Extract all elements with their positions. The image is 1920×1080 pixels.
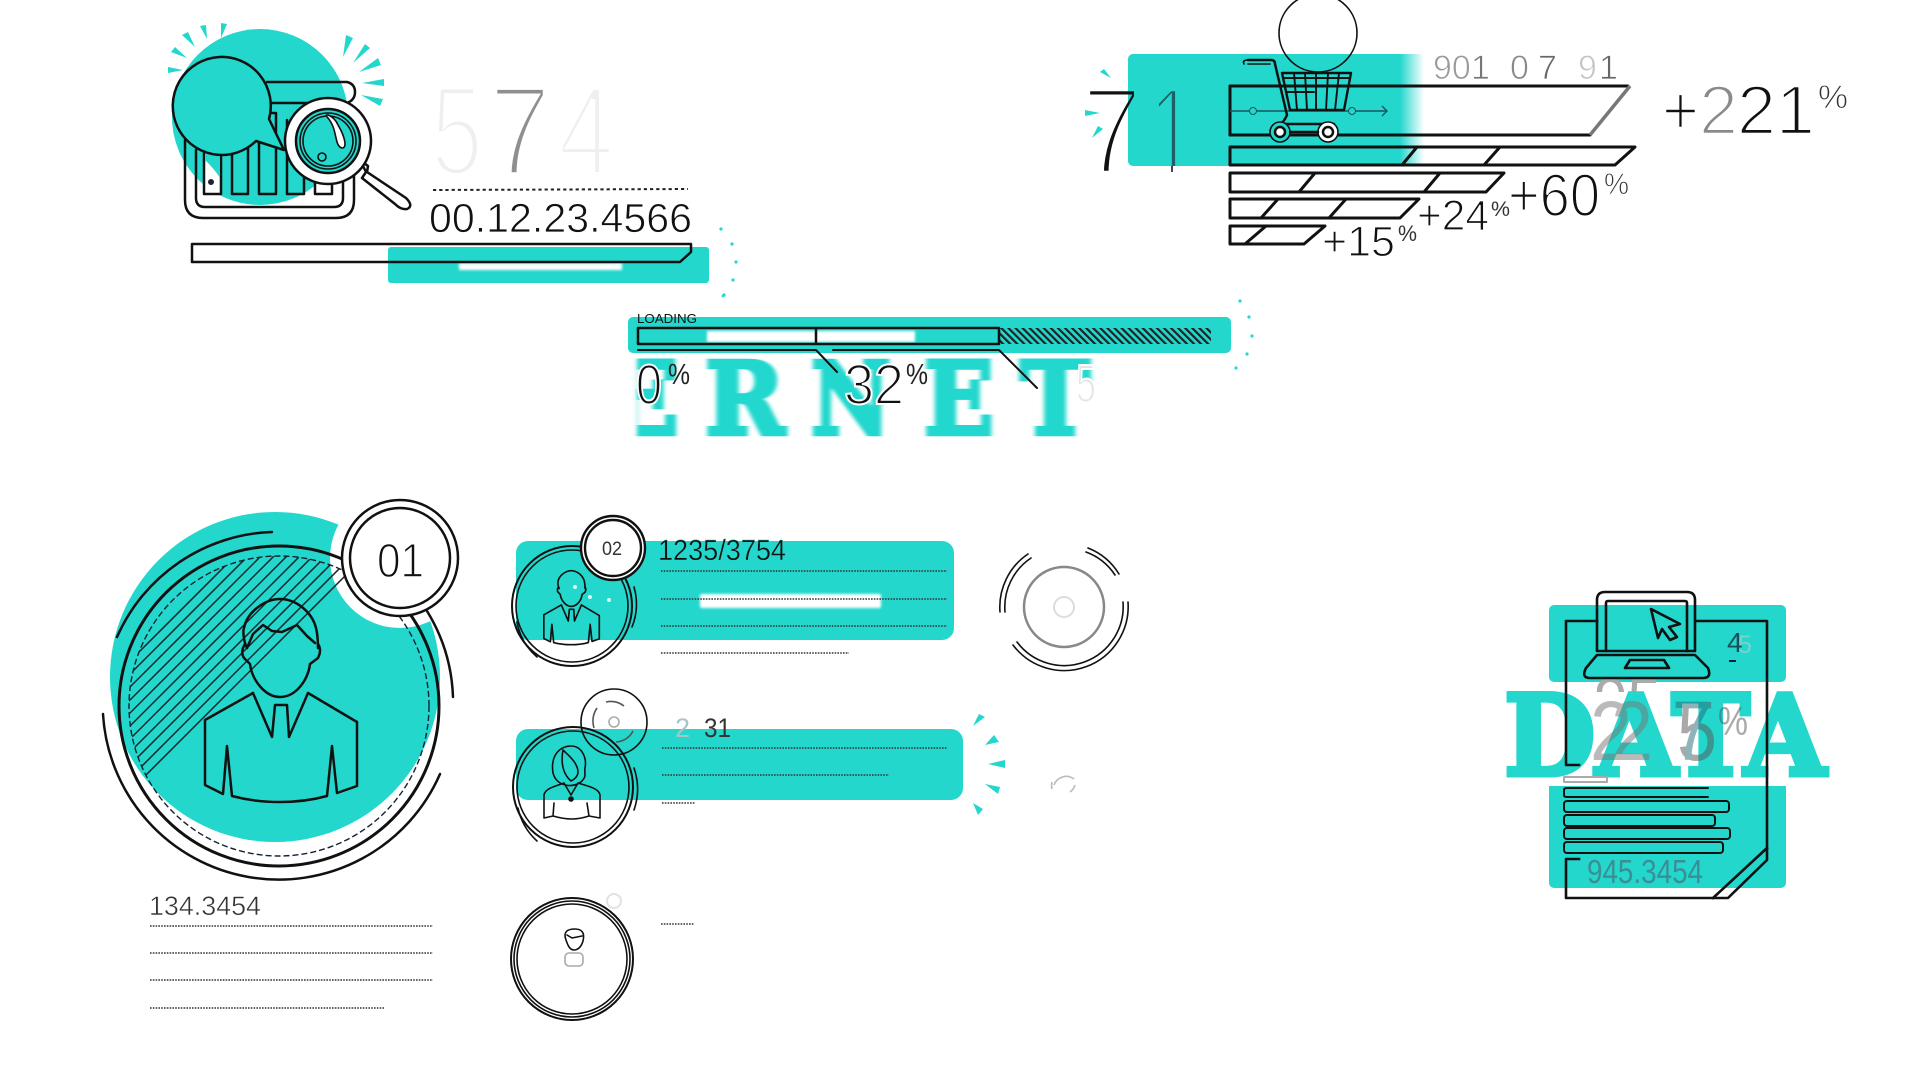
+221 percent: 2 <box>1699 71 1738 149</box>
top digits: 0 <box>1510 49 1529 87</box>
ghost digits above: 95 <box>1594 666 1661 733</box>
number 4 with ghost 5 <box>1727 627 1752 661</box>
value text: 134.3454 <box>149 891 261 921</box>
panel: avatar 03 <box>511 894 694 1020</box>
sparkles <box>573 585 611 602</box>
label: loading: LOADING <box>637 311 697 326</box>
teal card <box>516 729 963 800</box>
value text: 945.3454 <box>1587 853 1703 890</box>
badge 01 <box>342 500 458 616</box>
ghost digits: 2 <box>1590 684 1632 778</box>
number 71 <box>1090 91 1176 171</box>
number 71: 7 <box>1082 63 1142 201</box>
value text: 2 <box>675 713 690 743</box>
icon: bar chart frame <box>185 82 355 218</box>
badge white halo <box>330 488 470 628</box>
progress bar outline <box>192 244 691 262</box>
document text bars <box>1564 777 1730 853</box>
document outline <box>1566 621 1767 898</box>
ghost digits: 2 <box>1611 684 1653 778</box>
white highlight <box>707 331 915 342</box>
teal overlap on first bar <box>205 141 220 178</box>
top digits <box>1433 49 1618 87</box>
big number 574: 4 <box>558 60 614 203</box>
teal circle <box>110 512 440 842</box>
top digits: 9 <box>1578 49 1597 87</box>
white highlight <box>459 263 622 270</box>
large circle <box>1279 0 1357 72</box>
dots arc <box>722 295 1254 370</box>
bar outline <box>638 328 999 344</box>
burst rays <box>1085 69 1111 138</box>
stem of 1 below block <box>1171 166 1173 172</box>
icon: spinner <box>1052 776 1075 792</box>
+60 percent: +60 <box>1508 162 1600 229</box>
dotted divider <box>433 189 688 190</box>
badge 02: 02 <box>602 539 622 560</box>
+24 percent: % <box>1491 198 1510 221</box>
ghost digits <box>1590 684 1748 778</box>
+15 percent: +15 <box>1322 218 1395 266</box>
0 percent: 0 <box>636 353 662 417</box>
top digits: 90 <box>1433 49 1471 87</box>
icon: speech bubble <box>173 57 284 155</box>
white highlight <box>700 594 881 608</box>
number 4 with ghost 5: 4 <box>1727 627 1743 658</box>
word INTERNET: E <box>924 340 994 458</box>
badge 02 <box>581 516 645 580</box>
0 percent: % <box>668 359 690 391</box>
panel: card 03 <box>513 689 1075 847</box>
outer arcs <box>103 532 453 880</box>
32 percent: 32 <box>844 353 904 417</box>
panel: loading bar <box>628 294 1254 436</box>
value text: 1235/3754 <box>658 535 786 567</box>
hatch lines <box>129 556 344 776</box>
word INTERNET: T <box>1020 340 1090 458</box>
+15 percent: % <box>1398 221 1417 246</box>
panel: person 01 <box>102 498 460 1009</box>
icon: male avatar small <box>544 571 599 645</box>
dotted text lines <box>150 926 433 1008</box>
badge 01: 01 <box>377 535 424 588</box>
big number 574 <box>431 60 614 203</box>
leader lines <box>638 350 1037 388</box>
teal block top <box>1549 605 1786 682</box>
avatar rings <box>511 898 633 1020</box>
word INTERNET: E <box>603 340 679 458</box>
value text <box>675 713 731 743</box>
ghost digits: % <box>1718 700 1748 744</box>
+221 percent <box>1662 71 1848 149</box>
dotted text lines <box>662 748 947 803</box>
big number 574: 7 <box>489 60 551 203</box>
+221 percent: 21 <box>1737 71 1815 149</box>
+24 percent: +24 <box>1417 192 1489 240</box>
dotted text lines <box>661 571 947 653</box>
ghost digits: 7 <box>1672 684 1712 778</box>
teal fading block <box>1128 54 1424 166</box>
hatched remainder <box>999 328 1211 344</box>
word INTERNET: N <box>811 340 891 458</box>
cart flow arrow <box>1230 106 1387 116</box>
ghost digits: 5 <box>1677 684 1717 778</box>
placeholder badge <box>581 689 647 755</box>
icon: magnifying glass <box>285 98 410 209</box>
+221 percent: + <box>1662 71 1699 149</box>
icon: grey target <box>1000 548 1128 671</box>
icon: burst rays <box>168 23 384 106</box>
number 4 with ghost 5: 5 <box>1738 631 1752 659</box>
burst rays <box>973 714 1005 815</box>
top digits: 1 <box>1599 49 1618 87</box>
dotted text line <box>661 923 694 925</box>
teal bar <box>628 317 1231 353</box>
+60 percent: % <box>1604 168 1629 201</box>
faint dot <box>607 894 621 908</box>
teal progress block <box>388 247 709 283</box>
icon: laptop <box>1584 592 1709 678</box>
panel: analytics search <box>168 23 738 297</box>
avatar rings <box>512 546 636 666</box>
32 percent: % <box>906 359 928 391</box>
top digits: 7 <box>1538 49 1557 87</box>
word INTERNET <box>633 358 1095 436</box>
0 percent <box>636 353 690 417</box>
value text: 31 <box>704 713 731 743</box>
icon: small figure <box>565 929 584 966</box>
avatar rings <box>513 727 638 847</box>
teal block bottom <box>1549 786 1786 888</box>
dots arc <box>719 227 738 297</box>
icon: male avatar <box>205 599 357 802</box>
large slanted bar <box>1230 86 1630 135</box>
icon: female avatar <box>544 746 600 819</box>
icon: shopping cart <box>1244 60 1351 142</box>
word DATA: DATA <box>1504 672 1828 802</box>
growth bars <box>1230 147 1635 244</box>
panel: card 02 <box>512 516 1128 671</box>
+221 percent: % <box>1818 79 1848 115</box>
word INTERNET: R <box>705 340 786 458</box>
dashed ring <box>129 556 429 856</box>
panel: shopping cart growth <box>1082 0 1848 266</box>
main ring <box>119 546 439 866</box>
big number 574: 5 <box>431 60 483 203</box>
teal card <box>516 541 954 640</box>
teal circle backdrop <box>172 29 348 205</box>
top digits: 1 <box>1471 49 1490 87</box>
phone number text: 00.12.23.4566 <box>429 195 692 241</box>
ghost digit: 5 <box>1076 354 1096 414</box>
number 71: 1 <box>1149 63 1195 201</box>
panel: data document <box>1504 592 1828 898</box>
